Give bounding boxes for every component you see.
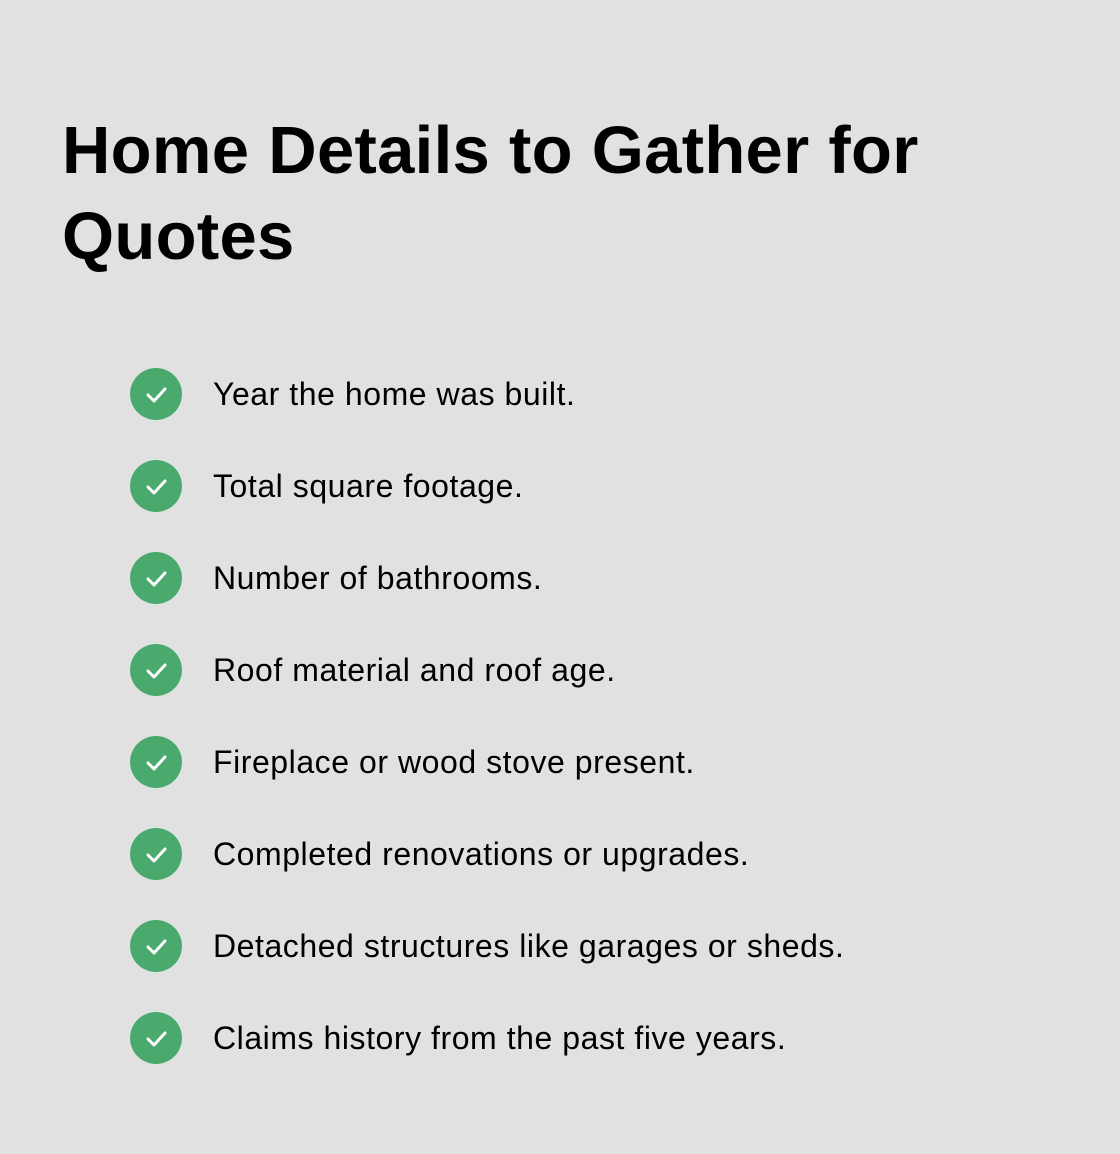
text: Roof material and roof age. <box>213 652 616 688</box>
icon: check <box>130 1012 182 1064</box>
text: Fireplace or wood stove present. <box>213 744 695 780</box>
text: Year the home was built. <box>213 376 575 412</box>
icon: check <box>130 828 182 880</box>
text: Detached structures like garages or sheds. <box>213 928 844 964</box>
icon: check <box>130 368 182 420</box>
icon: check <box>130 552 182 604</box>
list item: bathrooms <box>130 552 542 604</box>
list item: fireplace <box>130 736 695 788</box>
list item: square footage <box>130 460 523 512</box>
list item: renovations <box>130 828 749 880</box>
title: Quotes <box>62 199 295 274</box>
list item: year built <box>130 368 575 420</box>
list item: roof <box>130 644 616 696</box>
text: Number of bathrooms. <box>213 560 542 596</box>
title <box>62 113 919 274</box>
icon: check <box>130 460 182 512</box>
text: Completed renovations or upgrades. <box>213 836 749 872</box>
text: Total square footage. <box>213 468 523 504</box>
icon: check <box>130 736 182 788</box>
list item: claims history <box>130 1012 786 1064</box>
icon: check <box>130 644 182 696</box>
text: Claims history from the past five years. <box>213 1020 786 1056</box>
icon: check <box>130 920 182 972</box>
title: Home Details to Gather for <box>62 113 919 188</box>
list item: detached structures <box>130 920 844 972</box>
